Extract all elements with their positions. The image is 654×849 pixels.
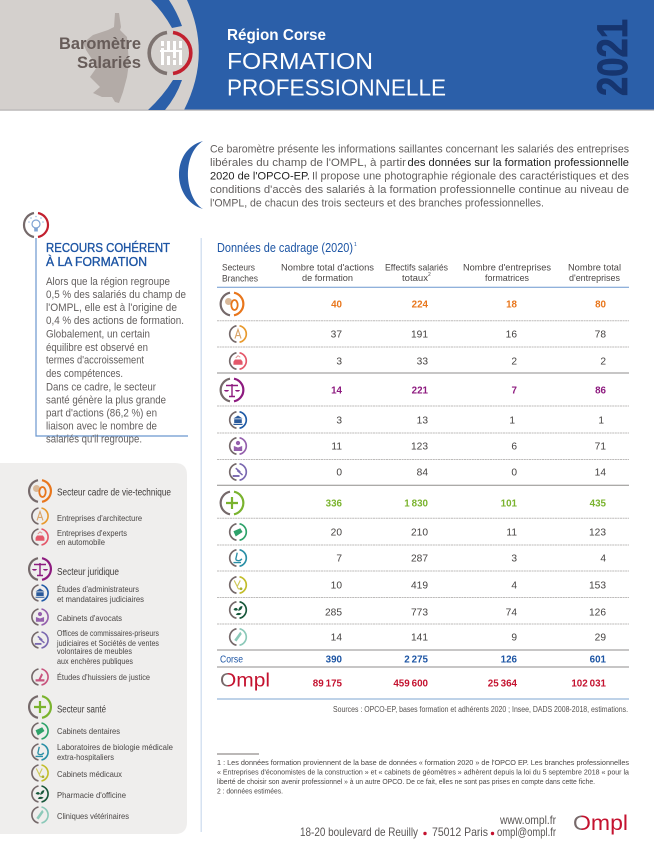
intro paragraph: libérales du champ de l'OMPL, à partir (210, 157, 406, 169)
vertical divider line (200, 238, 202, 832)
row: commissaires-priseurs: 0 (336, 468, 342, 478)
row: secteur santé: 336 (326, 498, 343, 510)
logo: Ompl: Ompl (220, 670, 270, 692)
row: architecture: 191 (411, 330, 428, 340)
panel body text (46, 276, 186, 446)
panel body text: des compétences. (46, 368, 123, 380)
panel body text: Alors que la région regroupe (46, 276, 170, 288)
row: experts en automobile: 2 (511, 356, 517, 368)
table column headers: Secteurs (222, 262, 255, 274)
panel body text: Globalement, un certain (46, 328, 150, 340)
row: secteur juridique (221, 379, 607, 401)
baromètre logo text: Salariés (77, 53, 141, 72)
row: avocats: 6 (511, 442, 517, 452)
legend: cabinets d'avocats: Cabinets d'avocats (57, 613, 122, 623)
footnotes: liberté de choisir son avenir professionnel » à un autre OPCO. De ce fait, elles ne sont pas prises en compte dans cette fiche. (217, 777, 595, 786)
legend: études d'administrateurs et mandataires judiciaires (32, 584, 144, 604)
table column headers: Nombre total d'actions (281, 262, 374, 274)
panel body text: salariés qu'il regroupe. (46, 434, 142, 446)
row: Corse total: 2 275 (404, 654, 429, 666)
panel heading: À LA FORMATION (46, 254, 147, 269)
row: Corse total: 126 (501, 654, 518, 666)
legend: secteur cadre de vie-technique: Secteur cadre de vie-technique (57, 488, 171, 498)
legend: études d'huissiers de justice: Études d'huissiers de justice (57, 672, 150, 682)
panel body text: 0,5 % des salariés du champ de (46, 289, 186, 301)
legend: pharmacie d'officine (32, 786, 126, 802)
year: 2021 (589, 19, 637, 96)
row: pharmacie: 126 (589, 608, 606, 618)
row: Corse total: 601 (590, 654, 607, 666)
row: pharmacie (230, 602, 606, 618)
baromètre logo text (59, 34, 141, 72)
legend: études d'administrateurs et mandataires judiciaires: et mandataires judiciaires (57, 594, 144, 604)
row: secteur cadre de vie-technique: 18 (506, 300, 518, 310)
row: OMPL total (220, 670, 607, 692)
row: administrateurs judiciaires: 1 (509, 416, 515, 426)
row: médicaux: 419 (411, 580, 428, 592)
row: commissaires-priseurs: 14 (595, 468, 606, 478)
row: commissaires-priseurs: 0 (511, 468, 517, 478)
row: laboratoires: 287 (411, 554, 428, 564)
row: secteur cadre de vie-technique: 80 (595, 300, 607, 310)
footer contact (300, 813, 556, 839)
panel body text: liaison avec le nombre de (46, 420, 157, 432)
legend: offices de commissaires-priseurs: aux enchères publiques (57, 656, 133, 666)
panel body text: 0,4 % des actions de formation. (46, 315, 184, 327)
footer contact: 75012 Paris (432, 825, 488, 839)
row: commissaires-priseurs (230, 464, 606, 480)
legend: offices de commissaires-priseurs: volontaires de meubles (57, 646, 132, 656)
legend: secteur santé: Secteur santé (57, 704, 106, 716)
row: Corse total: Corse (220, 654, 243, 666)
row: avocats: 123 (411, 442, 428, 452)
legend: entreprises d'architecture (32, 508, 142, 524)
panel: recours cohérent à la formation (24, 213, 188, 446)
row: OMPL total: 25 364 (488, 678, 518, 690)
row: secteur santé (221, 492, 607, 514)
table heading: Données de cadrage (2020) (217, 241, 353, 255)
row: OMPL total: 102 031 (571, 678, 607, 690)
intro paragraph: conditions d'accès des salariés à la formation professionnelle continue au niveau de (210, 184, 629, 196)
baromètre ring icon (149, 32, 191, 74)
row: laboratoires (230, 550, 606, 566)
footer contact: www.ompl.fr (499, 813, 556, 827)
row: secteur cadre de vie-technique (221, 293, 607, 315)
table column headers: Nombre d'entreprises (463, 262, 551, 274)
icon: light bulb (24, 213, 48, 237)
footer logo: Ompl: Ompl (573, 812, 628, 835)
row: vétérinaires: 9 (511, 632, 517, 644)
legend: cliniques vétérinaires: Cliniques vétérinaires (57, 811, 129, 821)
intro bracket (179, 141, 203, 209)
region label: Région Corse (227, 27, 326, 44)
legend: pharmacie d'officine: Pharmacie d'officine (57, 790, 126, 800)
table column headers: Nombre total (568, 262, 621, 274)
row: secteur juridique: 7 (512, 386, 518, 396)
row: médicaux (230, 577, 606, 593)
row: administrateurs judiciaires: 1 (598, 416, 604, 426)
footnotes: 2 : données estimées. (217, 786, 283, 796)
row: secteur juridique: 14 (331, 386, 343, 396)
legend: entreprises d'experts en automobile: Entreprises d'experts (57, 528, 127, 538)
intro paragraph (210, 144, 629, 210)
row: experts en automobile: 33 (417, 356, 428, 368)
table column headers: Branches (222, 274, 258, 284)
legend: laboratoires de biologie médicale: Laboratoires de biologie médicale (57, 742, 173, 752)
row: avocats: 71 (595, 442, 606, 452)
legend: cabinets dentaires: Cabinets dentaires (57, 726, 120, 736)
legend: études d'administrateurs et mandataires judiciaires: Études d'administrateurs (57, 584, 139, 594)
row: vétérinaires (230, 629, 606, 645)
row: dentaires: 123 (589, 528, 606, 538)
panel heading (46, 240, 170, 269)
row: dentaires: 11 (506, 528, 517, 538)
row: vétérinaires: 141 (411, 632, 428, 644)
legend: laboratoires de biologie médicale: extra-hospitaliers (57, 752, 114, 762)
baromètre logo text: Baromètre (59, 34, 141, 53)
row: experts en automobile: 3 (336, 356, 342, 368)
legend: offices de commissaires-priseurs: Offices de commissaires-priseurs (57, 628, 159, 638)
row: OMPL total: 89 175 (313, 678, 343, 690)
table column headers (222, 262, 621, 284)
row: laboratoires: 7 (336, 554, 342, 564)
row: vétérinaires: 29 (595, 632, 606, 644)
panel body text: l'OMPL, elle est à l'origine de (46, 302, 177, 314)
legend: entreprises d'experts en automobile (32, 528, 127, 547)
table column headers: d'entreprises (569, 273, 620, 284)
intro paragraph: Ce baromètre présente les informations saillantes concernant les salariés des entreprises (210, 144, 629, 156)
legend: entreprises d'architecture: Entreprises d'architecture (57, 513, 142, 523)
page header (0, 0, 654, 111)
row: administrateurs judiciaires: 13 (417, 416, 428, 426)
table column headers: 2 (428, 272, 431, 278)
legend: secteur santé (29, 696, 106, 718)
row: OMPL total: 459 600 (393, 678, 429, 690)
panel body text: Dans ce cadre, le secteur (46, 382, 156, 394)
row: dentaires: 20 (331, 528, 342, 538)
row: vétérinaires: 14 (331, 632, 342, 644)
legend: cliniques vétérinaires (32, 807, 129, 823)
table column headers: Effectifs salariés (385, 262, 448, 274)
row: avocats (230, 438, 606, 454)
row: Corse total (220, 654, 607, 666)
row: architecture (230, 326, 606, 342)
panel body text: équilibre est observé en (46, 342, 148, 354)
legend: secteur juridique: Secteur juridique (57, 567, 119, 578)
row: médicaux: 153 (589, 580, 606, 592)
legend: secteur juridique (29, 558, 119, 580)
row: secteur cadre de vie-technique: 40 (331, 300, 343, 310)
panel body text: part d'actions (86,2 %) en (46, 408, 157, 420)
legend: secteur cadre de vie-technique (29, 480, 171, 502)
row: médicaux: 4 (511, 580, 517, 592)
footnotes (217, 754, 630, 796)
row: laboratoires: 3 (511, 554, 517, 564)
row: secteur santé: 435 (590, 498, 607, 510)
table column headers: formatrices (485, 273, 529, 284)
intro paragraph: l'OMPL, de chacun des trois secteurs et des branches professionnelles. (210, 198, 544, 210)
row: avocats: 11 (331, 442, 342, 452)
legend: cabinets dentaires (32, 723, 120, 739)
row: experts en automobile: 2 (600, 356, 606, 368)
row: pharmacie: 773 (411, 608, 428, 618)
row: experts en automobile (230, 353, 606, 369)
row: secteur juridique: 221 (412, 386, 429, 396)
row: administrateurs judiciaires: 3 (336, 416, 342, 426)
footnotes: « Entreprises d'économistes de la construction » et « cabinets de géomètres » adhèrent depuis la loi du 5 septembre 2018 « pour la (217, 768, 630, 776)
panel: legend (0, 463, 187, 834)
intro paragraph: 2020 de l'OPCO-EP. (210, 170, 310, 182)
main title: FORMATION (227, 48, 373, 74)
table column headers: de formation (302, 273, 353, 284)
legend: cabinets d'avocats (32, 609, 122, 625)
footer contact: ompl@ompl.fr (497, 825, 556, 839)
row: architecture: 16 (506, 330, 517, 340)
row: pharmacie: 285 (325, 608, 342, 618)
legend: laboratoires de biologie médicale (32, 742, 173, 762)
row: laboratoires: 4 (600, 554, 606, 564)
intro paragraph: des données sur la formation professionnelle (408, 157, 629, 169)
row: dentaires (230, 524, 606, 540)
map of Corsica (83, 13, 129, 103)
panel body text: santé génère la plus grande (46, 394, 166, 406)
row: Corse total: 390 (326, 654, 343, 666)
legend: cabinets médicaux: Cabinets médicaux (57, 769, 123, 779)
table column headers: totaux (402, 273, 428, 284)
legend: offices de commissaires-priseurs (32, 628, 159, 666)
row: secteur santé: 1 830 (404, 498, 429, 510)
table: données de cadrage (217, 262, 629, 699)
legend: entreprises d'experts en automobile: en automobile (57, 537, 105, 547)
main title: PROFESSIONNELLE (227, 74, 446, 100)
footer contact: 18-20 boulevard de Reuilly (300, 825, 418, 839)
main title (227, 48, 446, 100)
panel body text: termes d'accroissement (46, 354, 144, 366)
row: secteur cadre de vie-technique: 224 (412, 300, 429, 310)
row: administrateurs judiciaires (230, 412, 604, 428)
legend: études d'huissiers de justice (32, 669, 150, 685)
legend: cabinets médicaux (32, 765, 123, 781)
panel heading: RECOURS COHÉRENT (46, 240, 170, 255)
intro paragraph: Il propose une photographie régionale des caractéristiques et des (312, 170, 629, 182)
row: secteur santé: 101 (501, 498, 518, 510)
legend: offices de commissaires-priseurs: judiciaires et Sociétés de ventes (56, 638, 159, 648)
row: médicaux: 10 (331, 580, 342, 592)
footnotes: 1 : Les données formation proviennent de la base de données « formation 2020 » de l'OPCO EP. Les branches professionnelles (217, 758, 629, 767)
row: architecture: 78 (595, 330, 606, 340)
table heading: 1 (354, 242, 357, 248)
row: dentaires: 210 (411, 528, 428, 538)
row: secteur juridique: 86 (595, 386, 607, 396)
row: pharmacie: 74 (506, 608, 517, 618)
row: architecture: 37 (331, 330, 342, 340)
row: commissaires-priseurs: 84 (417, 468, 428, 478)
